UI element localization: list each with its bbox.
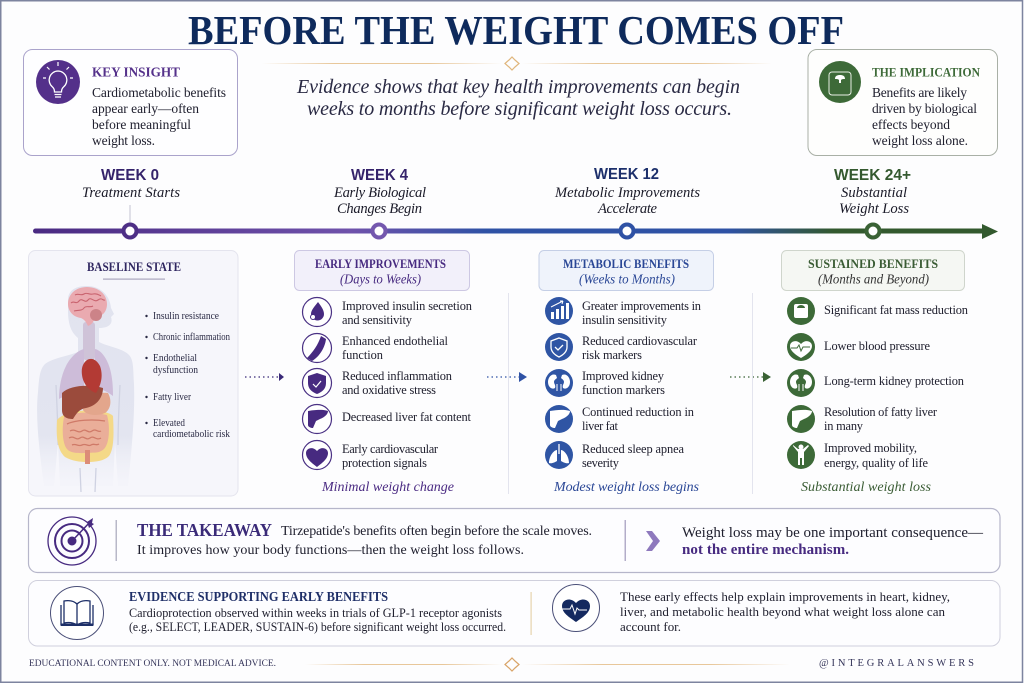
timeline labels: week 0 xyxy=(82,167,180,201)
list: early improvements: Decreased liver fat content xyxy=(342,410,472,424)
icon: shield check xyxy=(545,333,573,361)
text: explanation xyxy=(620,589,950,634)
list: metabolic benefits: Improved kidney xyxy=(582,369,665,383)
list: sustained benefits: Lower blood pressure xyxy=(824,339,930,353)
text: consequence statement: Weight loss may be one important consequence— xyxy=(682,525,984,541)
timeline labels: week 12: Accelerate xyxy=(597,201,658,217)
note: substantial weight loss: Substantial weight loss xyxy=(801,480,932,495)
text: explanation: These early effects help explain improvements in heart, kidney, xyxy=(620,589,950,604)
list: metabolic benefits: Reduced sleep apnea xyxy=(582,442,684,456)
list: baseline conditions: Insulin resistance xyxy=(153,311,219,322)
list: metabolic benefits: Greater improvements in xyxy=(582,299,701,313)
text: implication body: Benefits are likely xyxy=(872,85,967,100)
panel: baseline state xyxy=(28,250,238,496)
header: early improvements: EARLY IMPROVEMENTS xyxy=(315,256,446,271)
icon: rising bar chart xyxy=(545,297,573,325)
list: metabolic benefits: Continued reduction in xyxy=(582,405,694,419)
list: baseline conditions: Endothelial xyxy=(153,353,197,364)
subtitle: Evidence shows that key health improvements can begin xyxy=(296,76,740,98)
list: early improvements: and sensitivity xyxy=(342,313,413,327)
text: implication body xyxy=(872,85,977,148)
list: metabolic benefits: severity xyxy=(582,456,620,470)
text: takeaway message: It improves how your body functions—then the weight loss follows. xyxy=(137,543,524,558)
text: implication body: effects beyond xyxy=(872,117,950,132)
text: explanation: liver, and metabolic health beyond what weight loss alone can xyxy=(620,604,946,619)
illustration: human body with organs xyxy=(37,286,134,492)
list: metabolic benefits: function markers xyxy=(582,383,665,397)
list: sustained benefits: Improved mobility, xyxy=(824,441,917,455)
list: baseline conditions: Chronic inflammation xyxy=(153,332,231,343)
text: takeaway message: THE TAKEAWAY xyxy=(137,520,272,540)
arrow: baseline to early xyxy=(245,373,284,381)
list: metabolic benefits xyxy=(582,299,701,470)
icon: blood vessel xyxy=(302,334,332,362)
list: early improvements: Enhanced endothelial xyxy=(342,334,449,348)
panel: evidence xyxy=(28,580,1000,646)
arrow: early to metabolic xyxy=(487,372,527,382)
list: metabolic benefits: insulin sensitivity xyxy=(582,313,668,327)
icon: open book xyxy=(50,586,104,640)
text: explanation: account for. xyxy=(620,619,681,634)
heading: the implication: THE IMPLICATION xyxy=(872,64,981,80)
timeline labels: week 12: WEEK 12 xyxy=(594,166,659,183)
timeline labels: week 12 xyxy=(554,166,700,217)
list: early improvements: Early cardiovascular xyxy=(342,442,439,456)
text: key insight body: Cardiometabolic benefits xyxy=(92,85,226,100)
list: sustained benefits: energy, quality of life xyxy=(824,456,928,470)
text: evidence supporting early benefits: (e.g., SELECT, LEADER, SUSTAIN-6) before significant weight loss occurred. xyxy=(129,620,506,634)
list: sustained benefits: Resolution of fatty liver xyxy=(824,405,938,419)
icon: scale xyxy=(819,61,861,103)
subtitle xyxy=(296,76,740,120)
timeline labels: week 4: Early Biological xyxy=(333,185,426,201)
timeline labels: week 24+ xyxy=(834,167,911,217)
heading: baseline state: BASELINE STATE xyxy=(87,260,181,274)
text: takeaway message: Tirzepatide's benefits often begin before the scale moves. xyxy=(281,524,592,539)
arrow: metabolic to sustained xyxy=(730,372,771,382)
panel: the takeaway xyxy=(28,508,1000,572)
header: sustained benefits: (Months and Beyond) xyxy=(818,272,929,288)
text: evidence supporting early benefits: Cardioprotection observed within weeks in trials of GLP-1 receptor agonists xyxy=(129,606,502,620)
icon: heart with pulse xyxy=(552,584,600,632)
timeline labels: week 4: Changes Begin xyxy=(337,201,422,217)
list: baseline conditions xyxy=(145,311,231,440)
list: baseline conditions: cardiometabolic risk xyxy=(153,429,231,440)
icon: kidneys xyxy=(787,369,815,397)
ornament: top divider xyxy=(262,57,772,70)
icon: liver xyxy=(545,405,573,433)
footer: handle: @INTEGRALANSWERS xyxy=(819,658,974,669)
timeline labels: week 4 xyxy=(333,167,426,217)
text: key insight body xyxy=(92,85,226,148)
list: early improvements: Improved insulin secretion xyxy=(342,299,472,313)
icon: scale xyxy=(787,297,815,325)
header: metabolic benefits: (Weeks to Months) xyxy=(579,272,675,288)
timeline labels: week 0: Treatment Starts xyxy=(82,185,180,201)
text: takeaway message xyxy=(137,520,592,558)
panel: the implication xyxy=(808,50,998,156)
list: baseline conditions: Elevated xyxy=(153,418,186,429)
list: sustained benefits: Significant fat mass reduction xyxy=(824,303,968,317)
list: early improvements: protection signals xyxy=(342,456,427,470)
header: metabolic benefits: METABOLIC BENEFITS xyxy=(563,256,689,271)
timeline labels: week 12: Metabolic Improvements xyxy=(554,185,700,201)
list: early improvements: function xyxy=(342,348,383,362)
icon: heart pulse xyxy=(787,333,815,361)
list: metabolic benefits: risk markers xyxy=(582,348,642,362)
list: early improvements: and oxidative stress xyxy=(342,383,436,397)
header: early improvements: (Days to Weeks) xyxy=(340,272,421,288)
icon: person with raised arms xyxy=(787,441,815,469)
timeline labels: week 24+: Substantial xyxy=(841,185,907,201)
column: early improvements xyxy=(294,250,472,495)
timeline labels: week 24+: WEEK 24+ xyxy=(834,167,911,184)
icon: insulin drop xyxy=(302,298,332,326)
timeline labels: week 24+: Weight Loss xyxy=(839,201,909,217)
list: early improvements: Reduced inflammation xyxy=(342,369,452,383)
icon: chevron xyxy=(646,531,660,551)
list: early improvements xyxy=(342,299,472,470)
title: BEFORE THE WEIGHT COMES OFF xyxy=(188,7,844,53)
icon: liver xyxy=(302,404,332,434)
icon: light bulb xyxy=(36,60,80,104)
list: metabolic benefits: Reduced cardiovascular xyxy=(582,334,698,348)
text: implication body: weight loss alone. xyxy=(872,133,968,148)
timeline labels: week 4: WEEK 4 xyxy=(351,167,408,184)
text: consequence statement: not the entire mechanism. xyxy=(682,542,849,558)
subtitle: weeks to months before significant weight loss occurs. xyxy=(307,98,732,120)
ornament: footer divider xyxy=(305,658,790,671)
icon: target with arrow xyxy=(48,517,96,565)
panel: key insight xyxy=(24,50,238,156)
list: sustained benefits xyxy=(824,303,968,470)
note: modest weight loss begins: Modest weight loss begins xyxy=(553,480,700,495)
icon: heart xyxy=(302,440,332,470)
text: evidence supporting early benefits: EVIDENCE SUPPORTING EARLY BENEFITS xyxy=(129,589,388,604)
icon: lungs xyxy=(545,441,573,469)
list: baseline conditions: dysfunction xyxy=(153,365,199,376)
footer: disclaimer: EDUCATIONAL CONTENT ONLY. NOT MEDICAL ADVICE. xyxy=(29,659,276,669)
list: sustained benefits: Long-term kidney protection xyxy=(824,374,964,388)
list: baseline conditions: Fatty liver xyxy=(153,392,191,403)
header: early improvements xyxy=(294,250,470,290)
header: sustained benefits xyxy=(782,250,964,290)
timeline labels: week 0: WEEK 0 xyxy=(101,167,159,184)
column: metabolic benefits xyxy=(539,250,714,495)
timeline arrow xyxy=(33,205,998,239)
text: key insight body: appear early—often xyxy=(92,101,199,116)
text: implication body: driven by biological xyxy=(872,101,977,116)
icon: shield xyxy=(302,368,332,398)
heading: key insight: KEY INSIGHT xyxy=(92,64,180,80)
text: key insight body: weight loss. xyxy=(92,133,155,148)
text: key insight body: before meaningful xyxy=(92,117,191,132)
text: evidence supporting early benefits xyxy=(129,589,506,634)
text: consequence statement xyxy=(682,525,984,558)
icon: liver xyxy=(787,405,815,433)
list: sustained benefits: in many xyxy=(824,419,864,433)
header: sustained benefits: SUSTAINED BENEFITS xyxy=(808,256,938,271)
icon: kidneys xyxy=(545,369,573,397)
column: sustained benefits xyxy=(782,250,968,495)
header: metabolic benefits xyxy=(539,250,714,290)
list: metabolic benefits: liver fat xyxy=(582,419,619,433)
note: minimal weight change: Minimal weight change xyxy=(321,480,454,495)
